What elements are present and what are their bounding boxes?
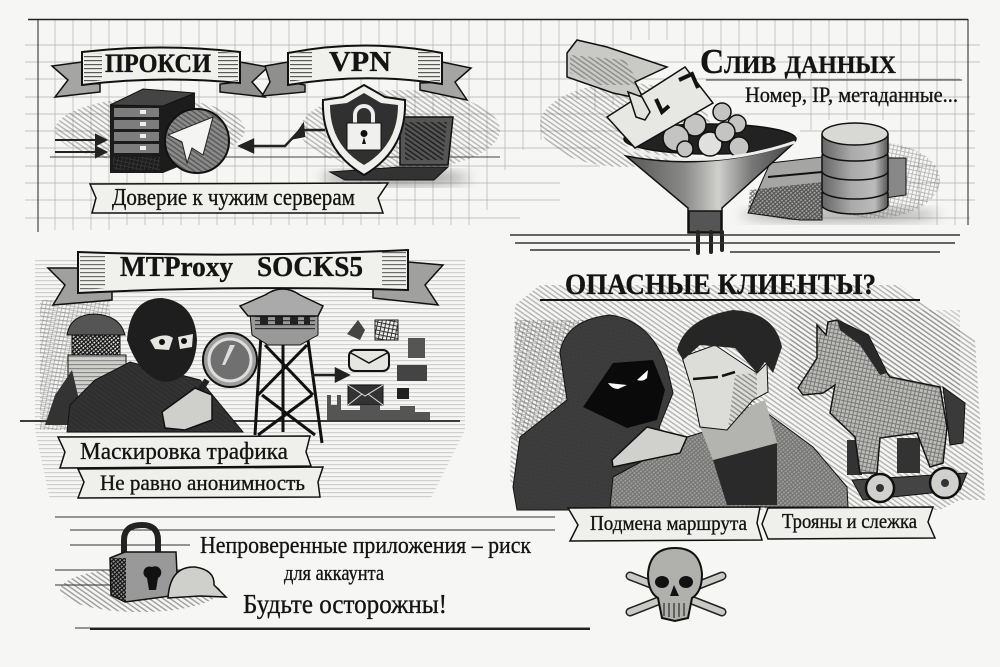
icon: funnel	[623, 142, 795, 253]
warning call to action: Будьте осторожны!	[243, 589, 447, 619]
icon: padlock	[110, 525, 178, 602]
arrow: to messages	[312, 369, 348, 381]
heading: SOCKS5: SOCKS5	[257, 251, 363, 283]
icon: domed building	[45, 314, 126, 425]
figure: hooded hacker	[513, 315, 673, 510]
panel: warning	[55, 517, 722, 629]
icon: telegram circle	[165, 109, 229, 173]
heading: data leak: Слив данных	[700, 42, 896, 81]
icon: small cylinder	[885, 158, 906, 198]
label: route spoofing: Подмена маршрута	[590, 511, 748, 535]
heading: ПРОКСИ: ПРОКСИ	[105, 49, 211, 78]
figure: masked man	[67, 298, 243, 432]
figure: hand holding magnifier	[162, 388, 212, 430]
icon: skull and crossbones	[630, 548, 722, 621]
icon: laptop	[330, 117, 453, 180]
label: traffic masking	[58, 436, 311, 468]
arrow: proxy to VPN connection	[240, 125, 325, 152]
caption banner: trust: Доверие к чужим серверам	[112, 185, 355, 211]
label: trojans and spying	[762, 507, 935, 539]
label: not anonymity: Не равно анонимность	[100, 470, 305, 495]
panel: data leak	[510, 40, 962, 253]
distant city	[327, 395, 430, 420]
heading: VPN: VPN	[329, 46, 391, 78]
background hatching	[35, 260, 465, 500]
icon: water tower	[240, 289, 323, 443]
heading: dangerous clients: ОПАСНЫЕ КЛИЕНТЫ?	[565, 268, 876, 301]
label: trojans and spying: Трояны и слежка	[782, 509, 918, 533]
background hatching	[510, 285, 985, 510]
hatching behind funnel	[540, 83, 710, 167]
ribbon: VPN	[262, 46, 471, 100]
icon: server	[110, 89, 195, 173]
ribbon: ПРОКСИ	[52, 48, 268, 97]
grid background: top panels	[25, 19, 980, 230]
icon: coins	[624, 103, 796, 157]
icon group: messages	[347, 320, 427, 405]
icon: helmet	[168, 567, 226, 598]
ribbon: MTProxy SOCKS5	[48, 250, 443, 305]
icon: bricks server	[748, 157, 822, 220]
arrows: incoming traffic	[55, 135, 106, 157]
icon: thumb	[628, 92, 650, 120]
label: route spoofing	[568, 507, 762, 541]
label: traffic masking: Маскировка трафика	[80, 439, 288, 465]
hatched shadow behind proxy and VPN	[50, 90, 500, 185]
icon: trojan horse	[798, 320, 967, 502]
icon: data card	[607, 67, 713, 148]
heading: MTProxy: MTProxy	[120, 251, 233, 283]
icon: shield with padlock	[323, 85, 405, 175]
subtitle: leaked data: Номер, IP, метаданные...	[745, 82, 958, 107]
warning text continuation: для аккаунта	[284, 560, 384, 585]
warning text: Непроверенные приложения – риск	[200, 533, 531, 559]
icon: magnifier	[197, 333, 257, 395]
icon: database	[822, 123, 888, 214]
hacker's hand on shoulder	[612, 427, 687, 467]
panel: MTProxy and SOCKS5	[20, 250, 465, 500]
figure: young man	[610, 310, 848, 507]
panel: dangerous clients	[510, 268, 985, 541]
icon: hand	[567, 40, 667, 118]
